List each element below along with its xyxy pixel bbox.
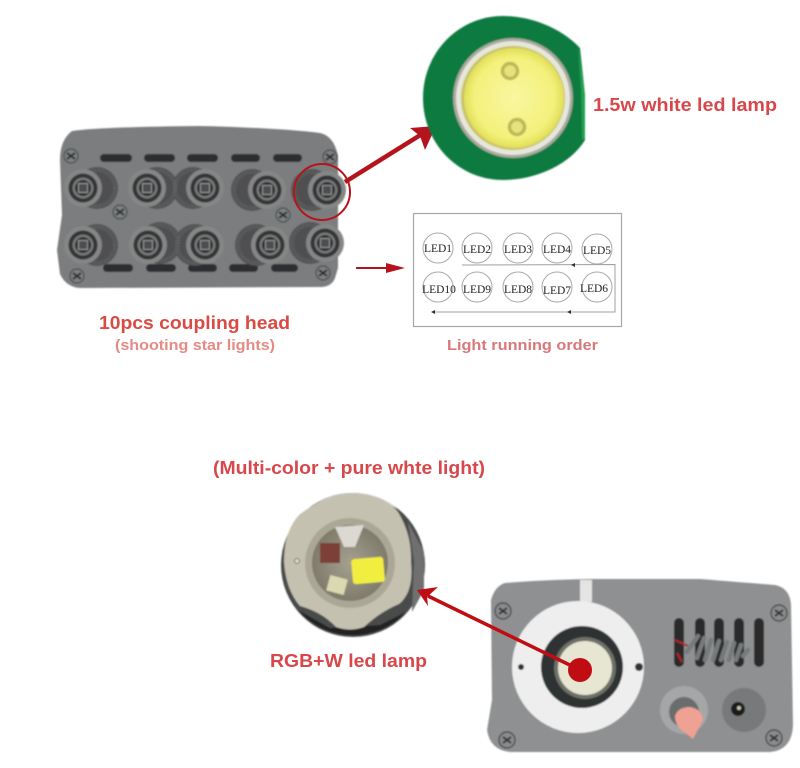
panel: 1.5w white led lamp xyxy=(423,16,585,180)
device body xyxy=(487,579,793,752)
green board xyxy=(423,16,585,180)
arrow: controller to RGB+W lamp xyxy=(417,587,592,682)
led labels: LED9 xyxy=(463,284,491,296)
label: shooting star lights: (shooting star lights) xyxy=(115,338,275,354)
led labels: LED6 xyxy=(580,283,608,295)
white led array xyxy=(558,641,612,695)
panel: controller front device xyxy=(487,579,793,752)
dark lens ring xyxy=(541,626,623,708)
heading: multi-color plus white: (Multi-color + pure whte light) xyxy=(213,458,485,478)
red chip xyxy=(320,543,340,563)
screws xyxy=(64,149,337,283)
mount holes xyxy=(518,664,524,670)
direction arrowheads xyxy=(431,263,575,314)
dc jack xyxy=(722,688,766,732)
device body xyxy=(57,126,338,288)
bottom dark crescent xyxy=(298,610,406,635)
label: light running order: Light running order xyxy=(447,337,598,354)
top notch xyxy=(580,580,592,602)
diagram frame xyxy=(414,214,622,326)
led labels: LED2 xyxy=(463,244,491,256)
top pale crescent xyxy=(310,493,400,510)
led bond dots xyxy=(502,64,518,78)
knurled knob bodies xyxy=(76,167,333,266)
beige gasket xyxy=(284,493,412,630)
lamp cavity xyxy=(305,518,395,608)
label: coupling head: 10pcs coupling head xyxy=(99,313,290,333)
callout: red circle on coupling head xyxy=(294,164,350,220)
top vent slots xyxy=(100,154,302,162)
arrow: coupling head to white lamp xyxy=(345,126,436,182)
solder pin xyxy=(294,558,300,564)
running order path xyxy=(433,264,615,312)
label: 1.5w white led lamp: 1.5w white led lamp xyxy=(593,95,777,115)
right housing ridges xyxy=(408,522,424,612)
led labels: LED7 xyxy=(543,285,571,297)
panel: light running order diagram xyxy=(414,214,622,326)
led labels: LED3 xyxy=(504,244,532,256)
arrow: to light running order xyxy=(356,263,405,273)
white led chip xyxy=(351,557,385,584)
bottom vent slots xyxy=(103,264,298,272)
led labels: LED4 xyxy=(543,244,571,256)
led labels: LED5 xyxy=(583,245,611,257)
white mount ring xyxy=(512,601,644,733)
coil xyxy=(687,636,748,660)
label: RGB+W led lamp: RGB+W led lamp xyxy=(270,651,427,671)
panel: coupling head device xyxy=(57,126,346,288)
coupling heads xyxy=(64,169,346,264)
green chip xyxy=(326,575,348,595)
led labels xyxy=(422,243,611,297)
lamp rim xyxy=(453,38,573,158)
panel: RGB+W led lamp xyxy=(281,493,425,637)
power knob xyxy=(660,686,708,734)
led circles xyxy=(423,233,612,302)
led labels: LED10 xyxy=(422,284,456,296)
top white chip xyxy=(335,525,364,547)
vent slots xyxy=(674,618,764,667)
lamp housing xyxy=(281,493,425,637)
screws xyxy=(495,603,787,748)
led labels: LED1 xyxy=(424,243,452,255)
led labels: LED8 xyxy=(504,284,532,296)
